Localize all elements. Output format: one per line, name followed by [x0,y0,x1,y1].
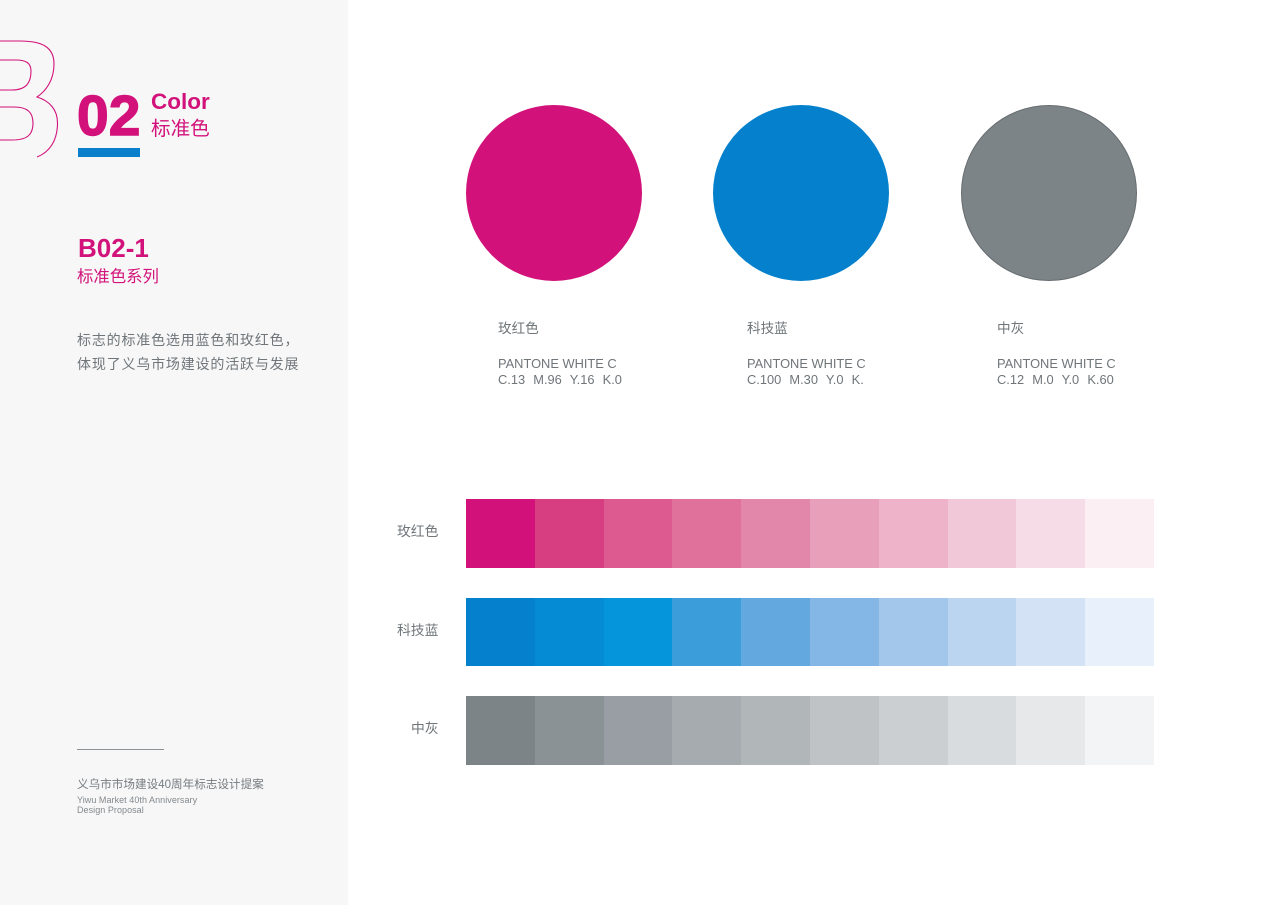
description text [77,332,299,372]
tint scale: blue [466,598,1154,666]
row label: grey: 中灰 [411,721,439,736]
row label: blue: 科技蓝 [397,623,438,638]
subsection code: B02-1 [78,233,149,263]
section number 02: 02 [77,84,140,148]
footer: English title: Yiwu Market 40th Anniversary [77,794,197,804]
color spec: grey: C.12 M.0 Y.0 K.60 [997,372,1114,387]
heading: Color: Color [151,89,210,114]
description text: 标志的标准色选用蓝色和玫红色， [77,332,299,348]
color spec: blue [747,321,866,387]
color spec: grey: 中灰 [997,321,1024,336]
footer: project title: 义乌市市场建设40周年标志设计提案 [77,778,264,791]
color spec: magenta: PANTONE WHITE C [498,356,617,370]
description text: 体现了义乌市场建设的活跃与发展 [77,356,299,372]
divider line [77,748,164,750]
color spec: magenta: 玫红色 [498,321,539,336]
panel: sidebar [0,0,348,905]
color spec: magenta: C.13 M.96 Y.16 K.0 [498,372,622,387]
tint scale: magenta [466,499,1154,568]
color spec: grey [997,321,1116,387]
footer: English title [77,794,198,815]
color circle: blue [713,105,889,281]
tint scale: grey [466,696,1154,765]
color spec: blue: C.100 M.30 Y.0 K. [747,372,864,387]
color circle: magenta [466,105,642,281]
row label: magenta: 玫红色 [397,524,438,539]
color spec: magenta [498,321,622,387]
color circle: grey [960,105,1136,281]
color spec: grey: PANTONE WHITE C [997,356,1116,370]
color spec: blue: 科技蓝 [747,321,788,336]
icon: outlined letter B [0,40,58,158]
footer: English title: Design Proposal [77,805,144,815]
color spec: blue: PANTONE WHITE C [747,356,866,370]
subsection title: 标准色系列 [77,268,159,286]
heading: 标准色: 标准色 [151,118,210,140]
accent bar [78,148,140,157]
